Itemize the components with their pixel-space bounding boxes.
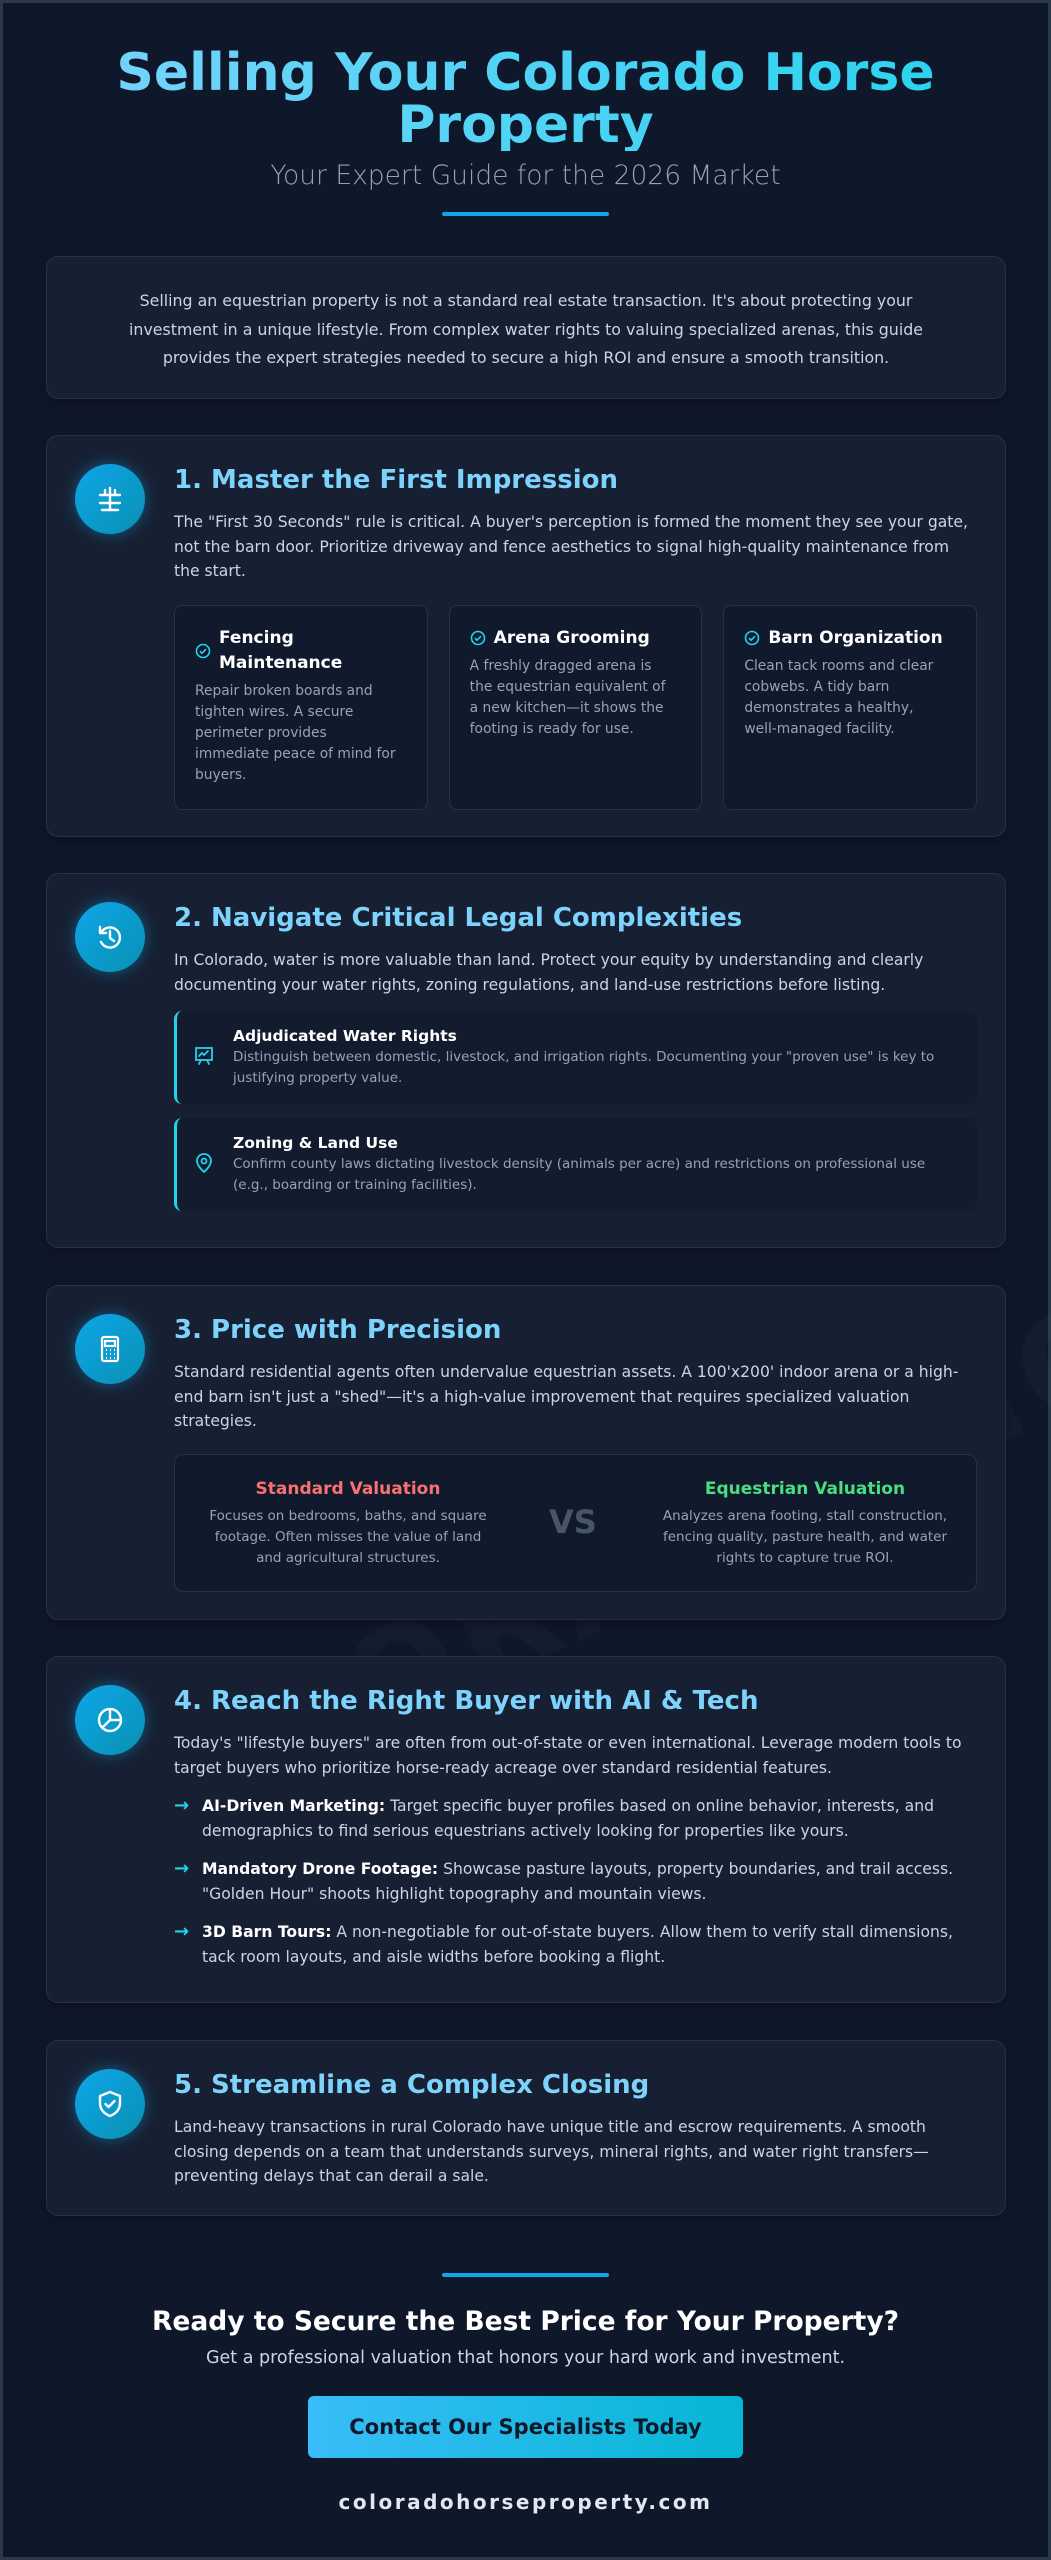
panel: section 2 legal <box>46 873 1006 1248</box>
item: zoning: Confirm county laws dictating livestock density (animals per acre) and restrictions on professional use (e.g., boarding or training facilities). <box>233 1156 925 1193</box>
card: fencing: Maintenance <box>219 652 342 672</box>
card: arena: Arena Grooming <box>494 628 650 648</box>
bullet list: Mandatory Drone Footage: Showcase pasture layouts, property boundaries, and trail access. "Golden Hour" shoots highlight topography and mountain views. <box>202 1860 953 1902</box>
icon: pie <box>75 1685 145 1755</box>
body 4: Today's "lifestyle buyers" are often from out-of-state or even international. Leverage modern tools to target buyers who prioritize horse-ready acreage over standard residential features. <box>174 1734 962 1776</box>
title <box>3 47 1048 151</box>
website url: coloradohorseproperty.com <box>339 2490 712 2514</box>
heading 5: 5. Streamline a Complex Closing <box>174 2070 649 2100</box>
heading 1: 1. Master the First Impression <box>174 465 618 495</box>
panel: section 3 price <box>46 1285 1006 1620</box>
CTA subtext: Get a professional valuation that honors your hard work and investment. <box>206 2348 845 2368</box>
equestrian valuation: Analyzes arena footing, stall construction, fencing quality, pasture health, and water rights to capture true ROI. <box>663 1508 947 1566</box>
comparison box <box>174 1454 977 1592</box>
body 3: Standard residential agents often undervalue equestrian assets. A 100'x200' indoor arena or a high-end barn isn't just a "shed"—it's a high-value improvement that requires specialized valuation strategies. <box>174 1363 958 1430</box>
card: fencing: Repair broken boards and tighten wires. A secure perimeter provides immediate peace of mind for buyers. <box>195 682 396 782</box>
item: water rights <box>174 1011 977 1104</box>
subtitle: Your Expert Guide for the 2026 Market <box>270 160 781 191</box>
icon: history <box>75 902 145 972</box>
bullet list: 3D Barn Tours: A non-negotiable for out-of-state buyers. Allow them to verify stall dimensions, tack room layouts, and aisle widths before booking a flight. <box>202 1923 953 1966</box>
CTA button: Contact Our Specialists Today <box>349 2415 702 2439</box>
panel: section 1 first impression <box>46 435 1006 837</box>
heading 2: 2. Navigate Critical Legal Complexities <box>174 903 742 933</box>
standard valuation <box>209 1478 487 1566</box>
card: arena <box>449 604 702 810</box>
item: zoning: Zoning & Land Use <box>233 1134 398 1152</box>
bullet list: → <box>174 1858 189 1879</box>
item: water rights: Adjudicated Water Rights <box>233 1027 457 1045</box>
title: Property <box>397 95 654 155</box>
intro text block <box>46 256 1006 399</box>
bullet list: → <box>174 1921 189 1942</box>
item: water rights: Distinguish between domestic, livestock, and irrigation rights. Documenting your "proven use" is key to justifying property value. <box>233 1049 934 1086</box>
CTA heading: Ready to Secure the Best Price for Your Property? <box>152 2306 899 2337</box>
body 2: In Colorado, water is more valuable than land. Protect your equity by understanding and clearly documenting your water rights, zoning regulations, and land-use restrictions before listing. <box>174 951 923 994</box>
standard valuation: Standard Valuation <box>256 1478 440 1498</box>
standard valuation: Focuses on bedrooms, baths, and square footage. Often misses the value of land and agricultural structures. <box>209 1508 487 1566</box>
bullet list: → <box>174 1795 189 1816</box>
panel: section 4 AI tech <box>46 1656 1006 2003</box>
bullet list: AI-Driven Marketing: Target specific buyer profiles based on online behavior, interests, and demographics to find serious equestrians actively looking for properties like yours. <box>202 1797 934 1840</box>
icon: calculator <box>75 1314 145 1384</box>
card: fencing <box>174 604 428 810</box>
card: barn: Barn Organization <box>768 628 943 648</box>
cards <box>174 605 977 810</box>
vs label: VS <box>549 1502 597 1540</box>
CTA button <box>308 2396 743 2458</box>
heading 4: 4. Reach the Right Buyer with AI & Tech <box>174 1686 758 1716</box>
item: zoning <box>174 1118 977 1211</box>
panel: section 5 closing <box>46 2040 1006 2216</box>
icon: shield <box>75 2069 145 2139</box>
title: Selling Your Colorado Horse <box>116 43 935 103</box>
icon: fence <box>75 464 145 534</box>
body 5: Land-heavy transactions in rural Colorado have unique title and escrow requirements. A smooth closing depends on a team that understands surveys, mineral rights, and water right transfers—preventing delays that can derail a sale. <box>174 2118 929 2185</box>
bullet list <box>174 1795 953 1966</box>
card: arena: A freshly dragged arena is the equestrian equivalent of a new kitchen—it shows the footing is ready for use. <box>470 658 665 736</box>
equestrian valuation: Equestrian Valuation <box>705 1478 905 1498</box>
card: barn: Clean tack rooms and clear cobwebs. A tidy barn demonstrates a healthy, well-managed facility. <box>744 658 933 736</box>
card: fencing: Fencing <box>219 628 294 648</box>
card: barn <box>723 604 977 810</box>
body 1: The "First 30 Seconds" rule is critical. A buyer's perception is formed the moment they see your gate, not the barn door. Prioritize driveway and fence aesthetics to signal high-quality maintenance from the start. <box>174 513 968 580</box>
equestrian valuation <box>663 1478 948 1566</box>
heading 3: 3. Price with Precision <box>174 1315 501 1345</box>
intro text block: Selling an equestrian property is not a standard real estate transaction. It's about protecting your investment in a unique lifestyle. From complex water rights to valuing specialized arenas, this guide provides the expert strategies needed to secure a high ROI and ensure a smooth transition. <box>129 291 923 367</box>
